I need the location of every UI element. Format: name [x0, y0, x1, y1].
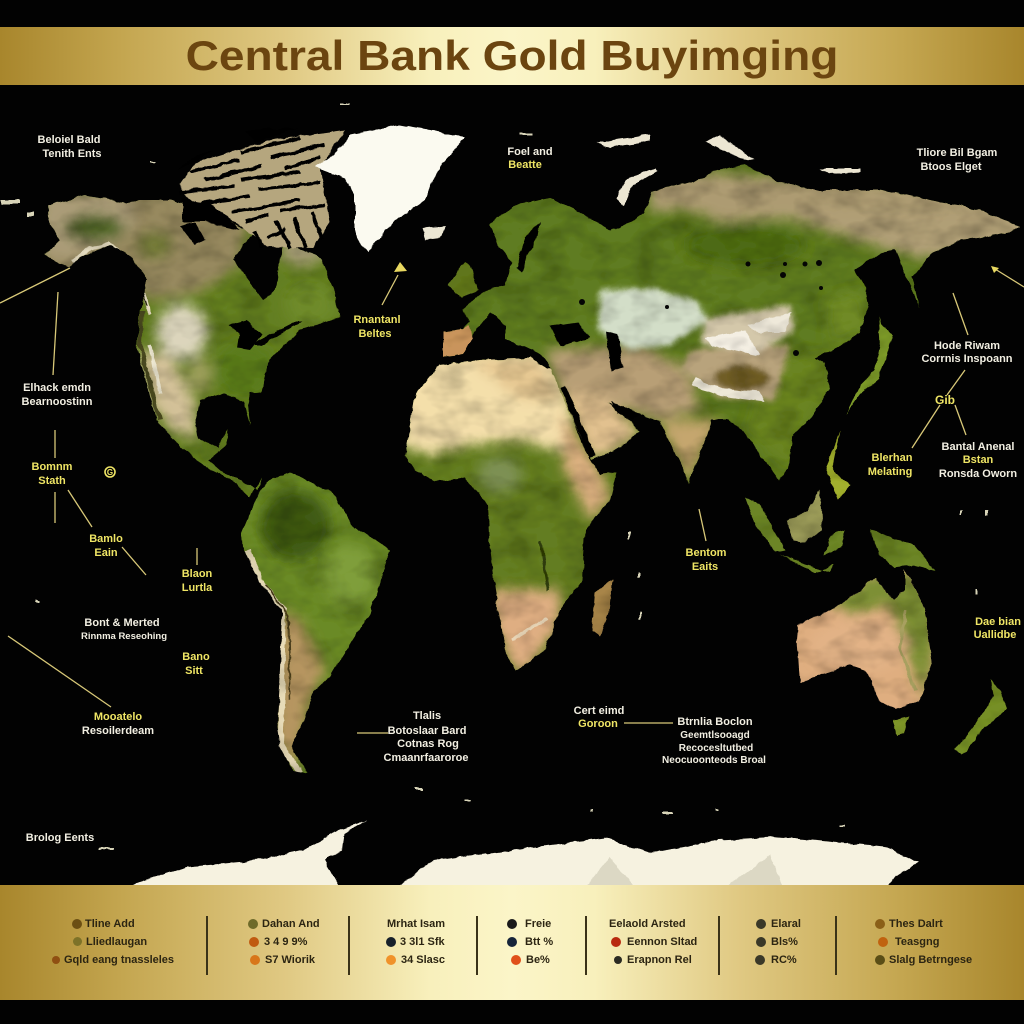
label: Bentom: Bentom: [686, 547, 727, 559]
Iberia: [443, 325, 472, 357]
legend column 5: Eennon Sltad: [627, 936, 697, 948]
separator: [585, 916, 586, 975]
legend column 4: Be%: [526, 954, 550, 966]
label: Btrnlia Boclon: Recocesltutbed: [679, 743, 753, 754]
legend column 5: [609, 918, 697, 966]
label: Tlalis: Tlalis: [413, 710, 441, 722]
label: Arctic east: Tliore Bil Bgam: [917, 147, 998, 159]
label: Cert eimd: Cert eimd: [574, 705, 624, 717]
label: Btrnlia Boclon: Neocuoonteods Broal: [662, 755, 766, 766]
label: Black: [22, 382, 93, 408]
icon: circled G: [105, 467, 115, 477]
North America: [44, 195, 340, 498]
legend column 3: [386, 918, 445, 966]
legend column 7: Teasgng: [895, 936, 939, 948]
label: North Atlantic: Rnantanl: [353, 314, 401, 326]
label: Central Annual: Bantal Anenal: [942, 441, 1014, 453]
label: North Pacific east: Hode Riwam: [934, 340, 1000, 352]
New Zealand: [955, 680, 1007, 755]
Eurasia: [435, 160, 1024, 490]
small islands: [0, 103, 988, 850]
icon: circled G: G: [107, 468, 113, 477]
legend column 1: [52, 918, 174, 966]
label: Bont and Merted: [81, 617, 167, 642]
title band: [0, 27, 1024, 85]
legend column 1: Tline Add: [85, 918, 135, 930]
legend column 7: Thes Dalrt: [889, 918, 943, 930]
separator: [718, 916, 720, 975]
label: Tlalis: [384, 710, 468, 764]
Antarctica: [125, 820, 919, 905]
label: Btrnlia Boclon: Btrnlia Boclon: [677, 716, 753, 728]
Africa: [404, 356, 616, 670]
label: Dae bian: Dae bian: [975, 616, 1021, 628]
label: Black: Elhack emdn: [23, 382, 91, 394]
label: Dae bian: Uallidbe: [974, 629, 1016, 641]
label: Gib: Gib: [935, 393, 955, 407]
legend column 2: Dahan And: [262, 918, 320, 930]
label: Btrnlia Boclon: [662, 716, 766, 766]
legend column 5: Erapnon Rel: [627, 954, 692, 966]
label: Arctic west: [38, 134, 102, 160]
label: Malaysia: Blerhan: [872, 452, 913, 464]
United Kingdom: [447, 262, 478, 298]
Madagascar: [592, 580, 612, 636]
inland seas: [516, 222, 640, 458]
label: Black: Bearnoostinn: [22, 396, 93, 408]
legend column 7: Slalg Betrngese: [889, 954, 972, 966]
separator: [835, 916, 836, 975]
label: Tlalis: Cotnas Rog: [397, 738, 459, 750]
icon: triangle marker: [394, 262, 407, 272]
legend column 4: [507, 918, 553, 966]
label: Bont and Merted: Rinnma Reseohing: [81, 631, 167, 642]
legend column 6: Elaral: [771, 918, 801, 930]
world map: [44, 195, 340, 498]
label: Mooatelo: Mooatelo: [94, 711, 142, 723]
legend column 1: Gqld eang tnassleles: [64, 954, 174, 966]
label: Arctic east: Btoos Elget: [920, 161, 982, 173]
label: Malaysia: Melating: [868, 466, 912, 478]
label: Bano: Bano: [182, 651, 210, 663]
label: Arctic west: Tenith Ents: [42, 148, 102, 160]
label: North Atlantic: Beltes: [358, 328, 392, 340]
label: Central Annual: Ronsda Oworn: [939, 468, 1017, 480]
label: Bentom: [686, 547, 727, 573]
legend column 4: Btt %: [525, 936, 553, 948]
separator: [476, 916, 478, 975]
label: Malaysia: [868, 452, 913, 478]
Arctic Russian islands: [596, 135, 860, 205]
Australia: [796, 570, 932, 709]
label: North Pacific east: Corrnis Inspoann: [921, 353, 1013, 365]
legend column 3: 3 3l1 Sfk: [400, 936, 445, 948]
Southeast Asia islands: [745, 430, 935, 572]
legend column 7: [875, 918, 972, 966]
separator: [348, 916, 350, 975]
legend column 4: Freie: [525, 918, 551, 930]
label: Arctic center: [507, 146, 553, 171]
Hudson Bay detail and Great Lakes: [180, 222, 302, 350]
Greenland: [315, 125, 465, 252]
label: Blaon: Lurtla: [182, 582, 213, 594]
label: Bamlo: [89, 533, 123, 559]
label: Blaon: Blaon: [182, 568, 213, 580]
label: Brolog Eents: Brolog Eents: [26, 832, 94, 844]
label: Arctic center: Foel and: [507, 146, 553, 158]
label: Tlalis: Cmaanrfaaroroe: [384, 752, 468, 764]
title: Central Bank Gold Buyimging: [186, 32, 838, 79]
legend column 3: 34 Slasc: [401, 954, 445, 966]
legend column 6: [755, 918, 801, 966]
label: North Atlantic: [353, 314, 401, 340]
legend band: [0, 885, 1024, 1000]
label: Bentom: Eaits: [692, 561, 718, 573]
label: Arctic center: Beatte: [508, 159, 542, 171]
label: Dae bian: [974, 616, 1021, 641]
label: Central Annual: [939, 441, 1017, 480]
label: Arctic east: [917, 147, 998, 173]
Iceland: [422, 226, 445, 240]
label: Bomnm: Stath: [38, 475, 66, 487]
label: Blaon: [182, 568, 213, 594]
legend column 5: Eelaold Arsted: [609, 918, 686, 930]
label: Mooatelo: Resoilerdeam: [82, 725, 154, 737]
label: Mooatelo: [82, 711, 154, 737]
label: Bomnm: Bomnm: [32, 461, 73, 473]
legend column 1: Lliedlaugan: [86, 936, 147, 948]
legend column 6: Bls%: [771, 936, 798, 948]
Tasmania: [892, 716, 910, 735]
label: Cert eimd: Goroon: [578, 718, 618, 730]
label: Bomnm: [32, 461, 73, 487]
label: Btrnlia Boclon: Geemtlsooagd: [680, 730, 750, 741]
Arctic islands: [178, 128, 345, 248]
lake dots: [579, 260, 823, 356]
South America: [241, 472, 390, 774]
legend column 3: Mrhat Isam: [387, 918, 445, 930]
callout lines: [0, 268, 1024, 733]
legend column 6: RC%: [771, 954, 797, 966]
icon: arrow head: [991, 266, 999, 273]
legend column 2: S7 Wiorik: [265, 954, 315, 966]
legend column 2: [248, 918, 320, 966]
label: Tlalis: Botoslaar Bard: [388, 725, 466, 737]
label: Central Annual: Bstan: [963, 454, 994, 466]
Japan: [846, 315, 893, 415]
label: Bamlo: Bamlo: [89, 533, 123, 545]
label: Bano: Sitt: [185, 665, 203, 677]
label: Arctic west: Beloiel Bald: [38, 134, 100, 146]
label: Bano: [182, 651, 210, 677]
label: Bont and Merted: Bont & Merted: [84, 617, 160, 629]
separator: [206, 916, 208, 975]
label: North Pacific east: [921, 340, 1013, 365]
legend column 2: 3 4 9 9%: [264, 936, 307, 948]
label: Bamlo: Eain: [94, 547, 118, 559]
label: Cert eimd: [574, 705, 624, 730]
